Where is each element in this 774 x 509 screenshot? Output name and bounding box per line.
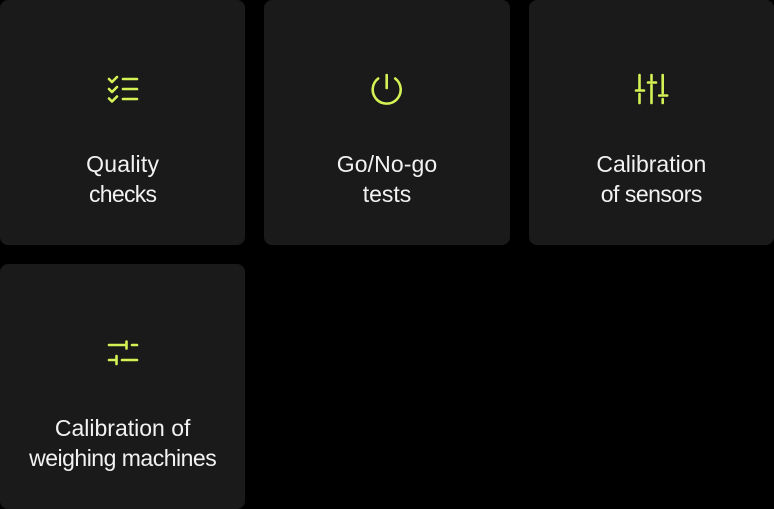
panel: go/no-go tests [264, 0, 510, 245]
label: go/no-go tests [337, 151, 437, 207]
label: calibration of sensors: Calibration [596, 151, 706, 177]
label: calibration of sensors [596, 151, 706, 207]
icon: horizontal sliders [108, 340, 138, 366]
label: calibration of weighing machines [29, 415, 216, 471]
label: calibration of weighing machines: Calibration of [55, 415, 190, 441]
label: quality checks: Quality [86, 151, 159, 177]
icon: checklist [108, 76, 138, 103]
label: quality checks [86, 151, 159, 207]
panel: quality checks [0, 0, 245, 245]
label: calibration of sensors: of sensors [601, 181, 702, 207]
icon: vertical sliders [634, 74, 668, 104]
panel: calibration of weighing machines [0, 264, 245, 509]
label: calibration of weighing machines: weighing machines [29, 445, 216, 471]
icon: power [371, 74, 402, 105]
panel: calibration of sensors [529, 0, 774, 245]
label: go/no-go tests: Go/No-go [337, 151, 437, 177]
label: quality checks: checks [89, 181, 156, 207]
label: go/no-go tests: tests [363, 181, 411, 207]
